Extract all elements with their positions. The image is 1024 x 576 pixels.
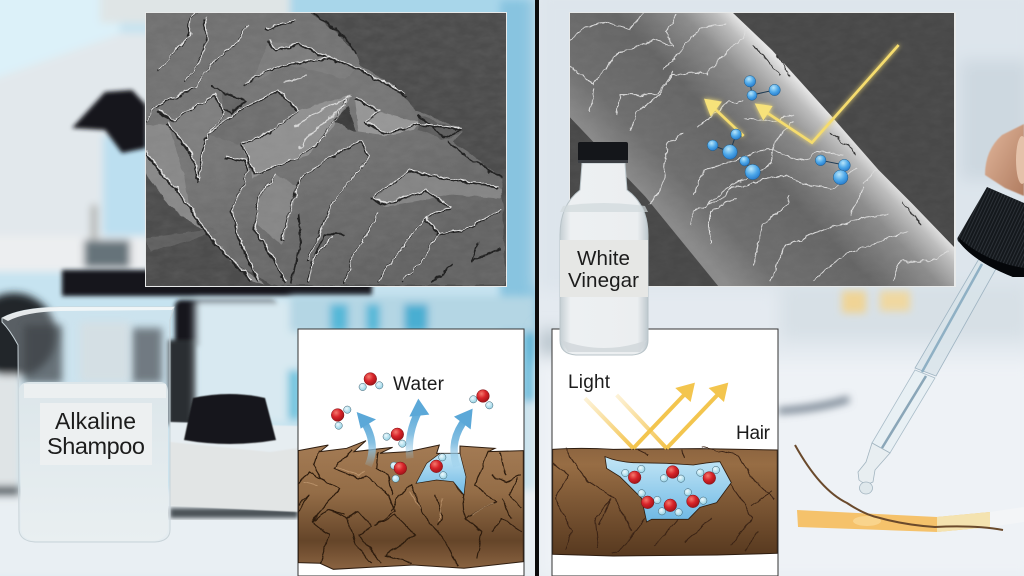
test strip and hair sample: [795, 445, 1024, 532]
left SEM panel: damaged hair cuticle: [145, 12, 507, 287]
shampoo label: Alkaline: [55, 408, 136, 434]
label: Water: Water: [393, 374, 445, 395]
hair strand with raised cuticles: [298, 441, 523, 569]
water molecules: [331, 373, 493, 482]
light reflection arrows: [704, 45, 899, 143]
water molecules in pool: [622, 465, 720, 516]
cuticle scale lines: [569, 15, 952, 283]
label: Hair: Hair: [736, 423, 771, 444]
reflected light rays: [585, 383, 728, 448]
water pool in cuticle gap: [416, 453, 466, 495]
bottle of white vinegar: [560, 142, 648, 355]
dropper cap: [957, 187, 1024, 277]
vinegar label: [560, 240, 648, 297]
right diagram: healthy hair retaining water and reflecting light: [552, 329, 778, 576]
right SEM panel: smooth hair cuticle with molecules and light reflection: [569, 12, 956, 287]
glass dropper with drop: [858, 187, 1024, 494]
right background: blurred lab scene: [536, 0, 1024, 576]
shampoo label: Shampoo: [47, 433, 145, 459]
beaker of alkaline shampoo: [2, 307, 174, 542]
vinegar label: Vinegar: [568, 269, 639, 292]
label: Light: Light: [568, 372, 611, 393]
center divider: [535, 0, 539, 576]
smooth hair strand: [553, 448, 777, 556]
hand holding dropper: [985, 124, 1024, 196]
left diagram: damaged hair losing water: [298, 329, 524, 576]
left background: blurred lab microscope scene: [0, 0, 550, 576]
water pool: [605, 457, 731, 522]
blue molecules: [707, 76, 850, 185]
microscope base and focus knob: [170, 394, 298, 518]
blue evaporation arrows: [357, 399, 473, 467]
bottle cap: [578, 142, 628, 163]
vinegar label: White: [577, 247, 630, 270]
shampoo label: [40, 403, 152, 465]
